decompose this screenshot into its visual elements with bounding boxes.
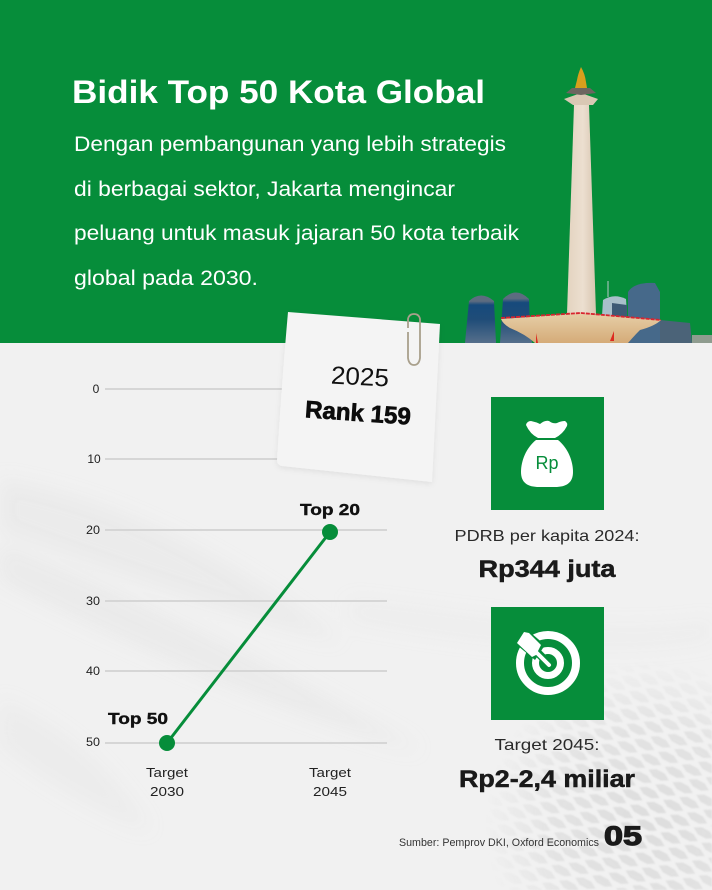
illustration: Monas monument and skyline <box>465 67 712 343</box>
intro paragraph: di berbagai sektor, Jakarta mengincar <box>74 178 455 201</box>
icon: money bag: Rp <box>535 453 559 473</box>
intro paragraph: Dengan pembangunan yang lebih strategis <box>74 133 506 156</box>
trend line <box>167 532 330 743</box>
y axis labels: 0 <box>93 382 100 396</box>
intro paragraph: peluang untuk masuk jajaran 50 kota terbaik <box>74 222 520 245</box>
note year: 2025 <box>330 362 390 392</box>
skyline buildings <box>465 281 712 343</box>
note rank: Rank 159 <box>304 396 412 431</box>
point: Top 50 <box>108 711 175 751</box>
intro paragraph <box>74 133 520 290</box>
tower cup <box>564 93 598 105</box>
point: Top 50: Top 50 <box>108 711 168 728</box>
golden flame <box>575 67 587 88</box>
y axis labels: 10 <box>87 452 101 466</box>
gridlines <box>105 389 387 743</box>
x axis label 2045: Target <box>309 765 351 780</box>
monument tower <box>567 105 596 314</box>
stat: PDRB per capita: PDRB per kapita 2024: <box>454 528 640 545</box>
red and white trim <box>501 313 661 320</box>
line chart <box>86 382 387 799</box>
stat: PDRB per capita <box>454 528 640 583</box>
y axis labels: 40 <box>86 664 100 678</box>
icon: target with arrow <box>491 607 604 720</box>
flags <box>536 331 614 343</box>
point: Top 20: Top 20 <box>300 502 360 519</box>
x axis label 2045: 2045 <box>313 784 347 799</box>
monument base <box>501 313 661 343</box>
green header band <box>0 0 712 343</box>
x axis label 2045 <box>309 765 351 799</box>
textured paper background <box>522 696 712 890</box>
stat: PDRB per capita: Rp344 juta <box>478 556 616 583</box>
sticky note: 2025 rank <box>277 312 440 482</box>
title: Bidik Top 50 Kota Global <box>72 74 485 110</box>
x axis label 2030: 2030 <box>150 784 184 799</box>
x axis label 2030 <box>146 765 188 799</box>
page number: 05 <box>604 821 642 851</box>
stat: target 2045: Target 2045: <box>494 737 600 754</box>
stat: target 2045 <box>459 737 635 793</box>
y axis labels <box>86 382 101 749</box>
paperclip <box>408 314 420 365</box>
y axis labels: 50 <box>86 735 100 749</box>
stat: target 2045: Rp2-2,4 miliar <box>459 766 635 793</box>
icon: money bag <box>491 397 604 510</box>
x axis label 2030: Target <box>146 765 188 780</box>
y axis labels: 30 <box>86 594 100 608</box>
y axis labels: 20 <box>86 523 100 537</box>
intro paragraph: global pada 2030. <box>74 267 258 290</box>
point: Top 20 <box>300 502 360 540</box>
source note: Sumber: Pemprov DKI, Oxford Economics <box>399 837 599 849</box>
